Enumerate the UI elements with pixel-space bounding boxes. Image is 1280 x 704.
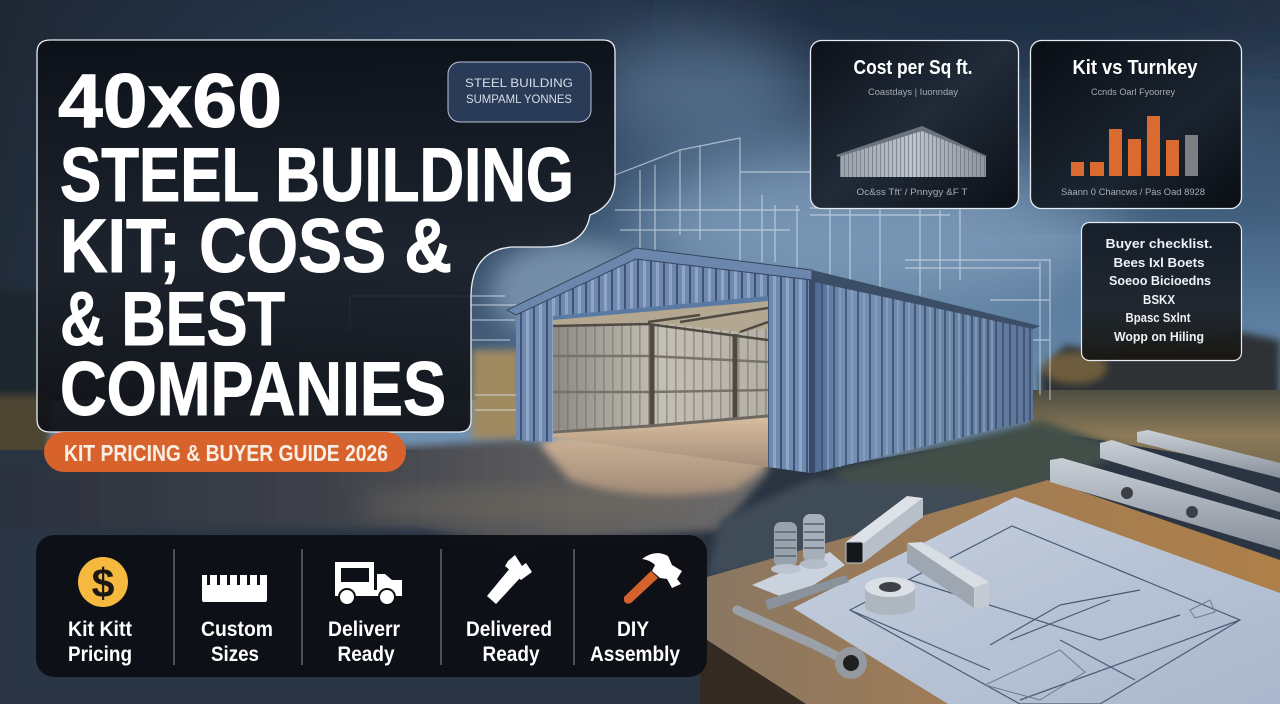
pencil [765,575,849,610]
icon: delivery truck [335,562,402,605]
small subtitle badge [448,62,591,122]
left grass [472,350,520,440]
ground [0,430,1280,704]
icon: dollar coin [78,557,128,607]
right grass field [1030,390,1280,490]
card: cost per square foot: Oc&ss Tft' / Pnnygy &F T [856,187,968,197]
workbench with blueprint and steel parts [700,430,1280,704]
label: kit pricing [68,618,132,666]
title text: & BEST [60,277,285,362]
gravel beyond table [707,478,1000,577]
card: buyer checklist: BSKX [1143,292,1175,307]
label: diy assembly [590,618,680,666]
wrench [737,610,867,679]
square steel tube [846,496,923,563]
card: buyer checklist: Bees Ixl Boets [1114,255,1204,270]
front wall and gable [516,260,809,473]
label: diy assembly: Assembly [590,643,680,666]
card: kit vs turnkey: Kit vs Turnkey [1072,57,1198,79]
orange guide banner [44,432,406,472]
right treeline [1040,332,1280,402]
icon: bolt [487,555,532,604]
title text: 40x60 [58,59,282,144]
side wall with perspective ribs [813,281,1033,473]
label: diy assembly: DIY [617,618,649,641]
card: cost per square foot [810,40,1018,208]
blueprint sheet [793,497,1280,704]
panel: main title [37,40,615,432]
steel washer [865,577,915,615]
title text: KIT; COSS & [60,204,452,289]
card: kit vs turnkey: Sàann 0 Chancws / Pàs Oad 8928 [1061,187,1205,197]
title text [58,59,574,432]
label: kit pricing: Kit Kitt [68,618,132,641]
bolts on plate [752,514,845,600]
card: kit vs turnkey: Ccnds Oarl Fyoorrey [1091,87,1175,97]
card: kit vs turnkey [1030,40,1242,208]
floor and lit apron [540,418,768,496]
card: buyer checklist: Soeoo Bicioedns [1109,273,1211,288]
title text: COMPANIES [60,347,446,432]
small subtitle badge: SUMPAML YONNES [466,94,572,106]
card: buyer checklist: Wopp on Hiling [1114,329,1204,344]
open bay interior [553,298,768,470]
card: cost per square foot: Coastdays | Iuonnday [868,87,959,97]
label: delivery ready: Deliverr [328,618,400,641]
label: delivered ready: Ready [482,643,540,666]
card: buyer checklist: Bpasc Sxlnt [1126,310,1191,325]
icon: hammer [624,553,682,604]
orange guide banner: KIT PRICING & BUYER GUIDE 2026 [64,440,388,466]
grass beside the wall [830,420,1130,530]
label: kit pricing: Pricing [68,643,132,666]
solid steel bar [907,542,989,608]
panel: feature strip [36,535,707,677]
label: delivery ready: Ready [338,643,395,666]
three steel beams [1050,430,1280,550]
label: custom sizes: Custom [201,618,273,641]
icon: ruler [202,575,267,602]
card: buyer checklist [1082,222,1242,360]
wooden table top [707,480,1280,704]
corner post and roof trim [809,275,815,473]
title text: STEEL BUILDING [60,133,574,218]
icon: dollar coin: $ [92,560,115,606]
steel building with open front bay [507,245,1040,496]
blueprint wireframe overlay behind the building [350,138,1050,410]
card: buyer checklist: Buyer checklist. [1106,236,1212,251]
label: custom sizes [201,618,273,666]
bar chart [1071,116,1198,176]
card: cost per square foot: Cost per Sq ft. [854,57,972,79]
label: delivered ready [466,618,552,666]
metal building illustration [836,126,987,177]
label: custom sizes: Sizes [211,643,259,666]
label: delivered ready: Delivered [466,618,552,641]
label: delivery ready [328,618,400,666]
small subtitle badge: STEEL BUILDING [465,78,573,90]
